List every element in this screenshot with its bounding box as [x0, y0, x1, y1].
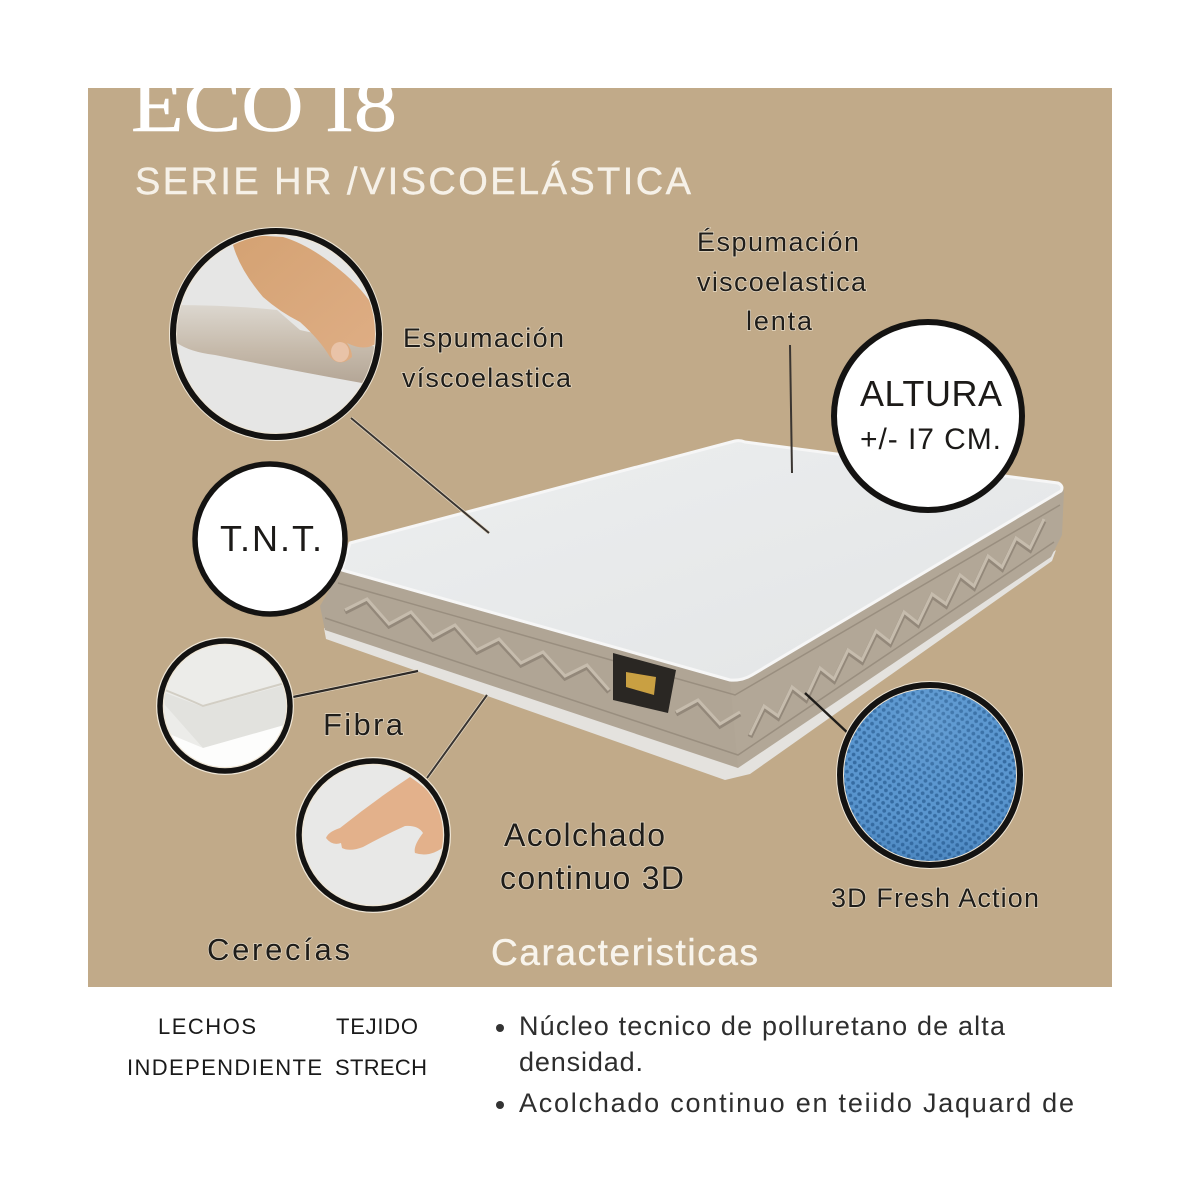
- bullet text 1: Núcleo tecnico de polluretano de alta: [519, 1011, 1006, 1041]
- bullet text 2: Acolchado continuo en teiido Jaquard de: [519, 1088, 1074, 1118]
- label: Espumación viscoelastica lenta: [697, 227, 867, 336]
- icon: blue 3D mesh circle: [840, 685, 1020, 865]
- mattress front side: [320, 568, 748, 768]
- badge: T.N.T.: [195, 464, 345, 614]
- label: Acolchado continuo 3D: continuo 3D: [500, 860, 684, 896]
- icon: foam layer circle: [160, 641, 295, 780]
- foam shadow: [177, 305, 374, 383]
- label: Cerecías: Cerecías: [207, 932, 350, 967]
- bullet 1: [496, 1024, 504, 1032]
- label: Espumación viscoelastica lenta: viscoelastica: [697, 267, 867, 297]
- text: lechos independiente: [127, 1014, 322, 1080]
- mattress right side: [730, 490, 1064, 768]
- badge: altura: ALTURA: [860, 373, 1002, 414]
- leader line: fibra: [293, 671, 418, 697]
- hand: [233, 235, 382, 362]
- badge: altura: +/- I7 CM.: [860, 423, 1001, 456]
- mattress: [320, 441, 1064, 780]
- badge: altura: [834, 322, 1022, 510]
- icon: hand pressing foam circle: [170, 231, 390, 437]
- bullet text 1: [519, 1011, 1006, 1077]
- mattress top: [342, 441, 1062, 680]
- leader line: acolchado: [427, 695, 487, 778]
- leader line: viscoelastica: [351, 418, 489, 533]
- label: Acolchado continuo 3D: [500, 817, 684, 896]
- text: lechos independiente: INDEPENDIENTE: [127, 1055, 322, 1080]
- heading: Caracteristicas: Caracteristicas: [491, 932, 758, 973]
- label: Espumación viscoelastica: [402, 323, 572, 393]
- subtitle: SERIE HR /VISCOELÁSTICA: [135, 160, 692, 203]
- text: tejido strech: TEJIDO: [336, 1014, 418, 1039]
- side zigzag quilting: [750, 519, 1044, 737]
- leader line: lenta: [790, 345, 792, 473]
- foam side: [163, 685, 290, 748]
- label: Fibra: Fibra: [323, 707, 404, 742]
- bullet text 1: densidad.: [519, 1047, 643, 1077]
- label: Espumación viscoelastica lenta: lenta: [746, 306, 813, 336]
- leader line: fresh: [805, 693, 850, 735]
- foam edge: [165, 683, 285, 706]
- mattress base: [324, 550, 1056, 780]
- text: lechos independiente: LECHOS: [158, 1014, 256, 1039]
- label: 3D Fresh Action: 3D Fresh Action: [831, 883, 1039, 913]
- badge: T.N.T.: T.N.T.: [220, 518, 322, 559]
- text: tejido strech: [335, 1014, 427, 1080]
- fingernail: [331, 342, 349, 362]
- panel: tan background: [88, 88, 1112, 987]
- icon: hand on mattress circle: [299, 761, 450, 909]
- bullet list: [496, 1011, 1074, 1118]
- mattress label tag: [613, 653, 676, 713]
- label: Acolchado continuo 3D: Acolchado: [504, 817, 665, 853]
- label: Espumación viscoelastica: víscoelastica: [402, 363, 572, 393]
- surface below: [172, 726, 283, 767]
- bullet 2: [496, 1101, 504, 1109]
- front zigzag quilting: [345, 599, 740, 726]
- title: ECO I8: [131, 66, 397, 148]
- label: Espumación viscoelastica lenta: Éspumación: [697, 227, 859, 257]
- label: Espumación viscoelastica: Espumación: [403, 323, 564, 353]
- quilting channels: [325, 505, 1060, 755]
- text: tejido strech: STRECH: [335, 1055, 427, 1080]
